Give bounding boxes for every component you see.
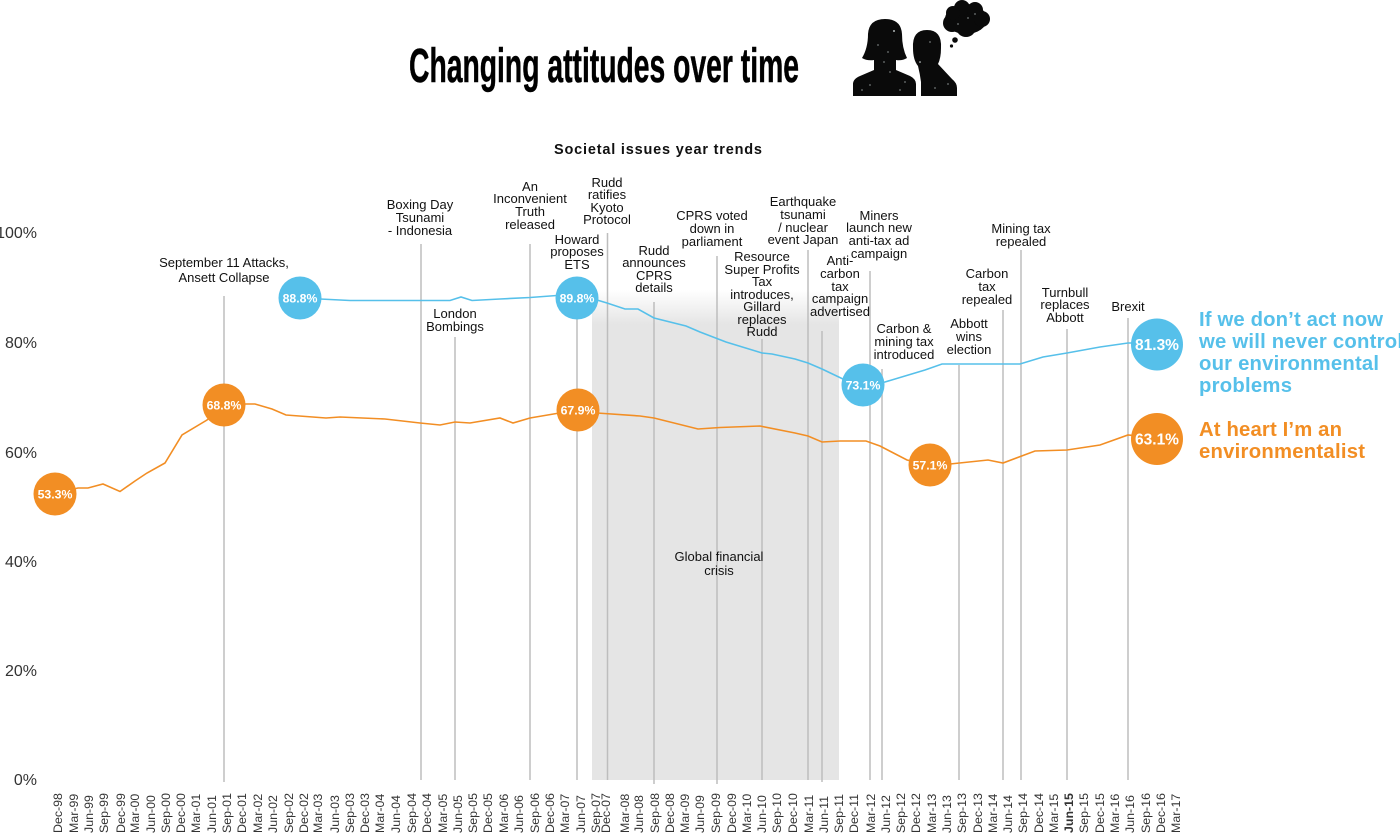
- event labels: repealed: [962, 292, 1012, 307]
- x axis labels: Sep-15: [1077, 793, 1091, 833]
- event labels: Super Profits: [724, 262, 800, 277]
- event labels: campaign: [851, 246, 907, 261]
- x axis labels: Sep-11: [832, 794, 846, 833]
- x axis labels: Mar-12: [864, 794, 878, 833]
- x axis labels: Sep-16: [1139, 793, 1153, 833]
- x axis labels: Jun-16: [1123, 795, 1137, 833]
- event labels: details: [635, 280, 673, 295]
- x axis labels: Jun-05: [451, 795, 465, 833]
- x axis labels: Jun-01: [205, 795, 219, 833]
- event labels: introduces,: [730, 287, 794, 302]
- event labels: Kyoto: [590, 200, 624, 215]
- data bubbles: orange: [34, 384, 1183, 516]
- x axis labels: Jun-99: [82, 795, 96, 833]
- event labels: Miners: [859, 208, 899, 223]
- event labels: Boxing Day: [387, 197, 454, 212]
- event labels: repealed: [996, 234, 1046, 249]
- x axis labels: Dec-15: [1093, 793, 1107, 833]
- legend: environmentalist: At heart I’m an: [1199, 419, 1342, 441]
- x axis labels: Sep-01: [220, 793, 234, 833]
- legend: never control: problems: [1199, 375, 1292, 397]
- event labels: parliament: [682, 234, 743, 249]
- event labels: Resource: [734, 249, 790, 264]
- event labels: ratifies: [588, 187, 627, 202]
- data bubbles: orange: 63.1%: [1135, 432, 1179, 448]
- x axis labels: Mar-04: [373, 794, 387, 833]
- x axis labels: Sep-99: [97, 793, 111, 833]
- event labels: tax: [978, 279, 996, 294]
- legend: environmentalist: environmentalist: [1199, 441, 1365, 463]
- x axis labels: Dec-11: [847, 794, 861, 833]
- legend: never control: If we don’t act now: [1199, 309, 1383, 331]
- x axis labels: Dec-04: [420, 793, 434, 833]
- x axis labels: Jun-14: [1001, 795, 1015, 833]
- x axis labels: Mar-01: [189, 794, 203, 833]
- y axis labels: 60%: [5, 445, 37, 462]
- event labels: Earthquake: [770, 194, 836, 209]
- event labels: London: [433, 306, 477, 321]
- event labels: Carbon &: [877, 321, 932, 336]
- event labels: Global financial: [675, 549, 764, 564]
- event labels: wins: [955, 329, 982, 344]
- event labels: Gillard: [743, 299, 781, 314]
- event labels: Bombings: [426, 319, 484, 334]
- legend: never control: we will never control: [1198, 331, 1400, 353]
- chart subtitle: Societal issues year trends: [554, 142, 762, 158]
- event labels: advertised: [810, 304, 870, 319]
- x axis labels: Mar-02: [251, 794, 265, 833]
- event labels: Mining tax: [991, 221, 1051, 236]
- x axis labels: Sep-05: [466, 793, 480, 833]
- event labels: Brexit: [1111, 299, 1145, 314]
- data bubbles: blue: 89.8%: [560, 292, 594, 306]
- event labels: tax: [831, 279, 849, 294]
- x axis labels: Jun-13: [940, 795, 954, 833]
- x axis labels: Dec-16: [1154, 793, 1168, 833]
- event labels: CPRS voted: [676, 208, 748, 223]
- event labels: Turnbull: [1042, 285, 1088, 300]
- event labels: Rudd: [638, 243, 670, 258]
- event labels: campaign: [812, 291, 868, 306]
- x axis labels: Mar-08: [618, 794, 632, 833]
- x axis labels: Mar-05: [436, 794, 450, 833]
- x axis labels: Dec-03: [358, 793, 372, 833]
- event labels: Ansett Collapse: [178, 270, 270, 285]
- x axis labels: Dec-10: [786, 793, 800, 833]
- event labels: event Japan: [768, 232, 838, 247]
- x axis labels: Mar-15: [1047, 794, 1061, 833]
- x axis labels: Jun-12: [879, 795, 893, 833]
- x axis labels: Dec-07: [599, 793, 613, 833]
- icon: two people with thought bubble: [853, 0, 990, 96]
- x axis labels: Sep-12: [894, 793, 908, 833]
- event labels: ETS: [564, 257, 590, 272]
- event labels: crisis: [704, 563, 734, 578]
- event labels: replaces: [1040, 297, 1090, 312]
- x axis labels: Mar-00: [128, 794, 142, 833]
- x axis labels: Jun-03: [328, 795, 342, 833]
- x axis labels: Sep-04: [405, 793, 419, 833]
- event labels: Anti-: [827, 253, 853, 268]
- x axis labels: Dec-13: [971, 793, 985, 833]
- event labels: An: [522, 179, 538, 194]
- x axis labels: Sep-00: [159, 793, 173, 833]
- line: never control (blue): [299, 294, 1157, 385]
- x axis labels: Mar-16: [1108, 794, 1122, 833]
- event labels: Carbon: [966, 266, 1008, 281]
- data bubbles: blue: [278, 276, 1183, 406]
- x axis labels: Sep-03: [343, 793, 357, 833]
- event marker lines: [224, 233, 1128, 784]
- event labels: election: [947, 342, 991, 357]
- y axis labels: 20%: [5, 663, 37, 680]
- data bubbles: orange: 57.1%: [913, 458, 947, 472]
- data bubbles: blue: 73.1%: [846, 378, 880, 392]
- event labels: anti-tax ad: [849, 233, 909, 248]
- event labels: down in: [690, 221, 734, 236]
- event labels: - Indonesia: [388, 223, 453, 238]
- event labels: mining tax: [874, 334, 934, 349]
- event labels: Tax: [752, 274, 773, 289]
- y axis labels: 40%: [5, 554, 37, 571]
- event labels: September 11 Attacks,: [159, 255, 289, 270]
- event labels: Abbott: [950, 316, 988, 331]
- x axis labels: Dec-14: [1032, 793, 1046, 833]
- event labels: Rudd: [591, 175, 623, 190]
- x axis labels: Jun-09: [693, 795, 707, 833]
- event labels: launch new: [846, 220, 912, 235]
- event labels: proposes: [550, 244, 604, 259]
- x axis labels: Dec-12: [909, 793, 923, 833]
- x axis labels: Sep-13: [955, 793, 969, 833]
- event labels: Inconvenient: [493, 191, 567, 206]
- x axis labels: Mar-06: [497, 794, 511, 833]
- x axis labels: Sep-08: [648, 793, 662, 833]
- data bubbles: orange: 53.3%: [38, 488, 72, 502]
- x axis labels: Jun-07: [574, 795, 588, 833]
- event labels: CPRS: [636, 268, 672, 283]
- x axis labels: Mar-09: [678, 794, 692, 833]
- x axis labels: Dec-05: [481, 793, 495, 833]
- x axis labels: Mar-14: [986, 794, 1000, 833]
- x axis labels: Sep-14: [1016, 793, 1030, 833]
- x axis labels: Jun-10: [755, 795, 769, 833]
- x axis labels: Mar-99: [67, 794, 81, 833]
- event labels: replaces: [737, 312, 787, 327]
- x axis labels: Mar-03: [311, 794, 325, 833]
- event labels: Tsunami: [396, 210, 444, 225]
- x axis labels: Dec-06: [543, 793, 557, 833]
- event labels: / nuclear: [778, 220, 829, 235]
- x axis labels: Dec-01: [235, 793, 249, 833]
- x axis labels: Mar-07: [558, 794, 572, 833]
- event labels: announces: [622, 255, 686, 270]
- event labels: Protocol: [583, 212, 631, 227]
- line: environmentalist (orange): [55, 404, 1157, 493]
- shaded band: global financial crisis: [592, 290, 839, 780]
- legend: never control: [1198, 309, 1400, 397]
- x axis labels: Dec-00: [174, 793, 188, 833]
- x axis labels: Mar-10: [740, 794, 754, 833]
- x axis labels: Mar-11: [802, 795, 816, 833]
- x axis labels: Jun-02: [266, 795, 280, 833]
- event labels: Truth: [515, 204, 545, 219]
- event labels: released: [505, 217, 555, 232]
- data bubbles: orange: 68.8%: [207, 398, 241, 412]
- y axis labels: [0, 225, 37, 789]
- x axis labels: Sep-02: [282, 793, 296, 833]
- x axis labels: Dec-99: [114, 793, 128, 833]
- x axis labels: Jun-08: [632, 795, 646, 833]
- data bubbles: orange: 67.9%: [561, 404, 595, 418]
- event labels: Howard: [555, 232, 599, 247]
- x axis labels: Jun-11: [817, 796, 831, 833]
- data bubbles: blue: 81.3%: [1135, 337, 1179, 354]
- x axis labels: Jun-00: [144, 795, 158, 833]
- x axis labels: Sep-07: [589, 793, 603, 833]
- x axis labels: Jun-06: [512, 795, 526, 833]
- x axis labels: Dec-08: [663, 793, 677, 833]
- event labels: Abbott: [1046, 310, 1084, 325]
- x axis labels: Sep-09: [709, 793, 723, 833]
- event labels: [159, 175, 1145, 578]
- x axis labels: Jun-04: [389, 795, 403, 833]
- event labels: tsunami: [780, 207, 826, 222]
- x axis labels: Sep-10: [770, 793, 784, 833]
- title: Changing attitudes over time: [409, 40, 799, 93]
- x axis labels: Dec-09: [725, 793, 739, 833]
- legend: never control: our environmental: [1199, 353, 1379, 375]
- legend: environmentalist: [1199, 419, 1365, 463]
- x axis labels: [51, 793, 1183, 833]
- data bubbles: blue: 88.8%: [283, 292, 317, 306]
- event labels: introduced: [874, 347, 934, 362]
- x axis labels: Mar-17: [1169, 794, 1183, 833]
- x axis labels: Mar-13: [925, 794, 939, 833]
- y axis labels: 80%: [5, 335, 37, 352]
- event labels: Rudd: [746, 324, 778, 339]
- event labels: carbon: [820, 266, 860, 281]
- x axis labels: Jun-15: [1062, 793, 1076, 833]
- y axis labels: 0%: [14, 772, 37, 789]
- x axis labels: Sep-06: [528, 793, 542, 833]
- x axis labels: Dec-02: [297, 793, 311, 833]
- x axis labels: Dec-98: [51, 793, 65, 833]
